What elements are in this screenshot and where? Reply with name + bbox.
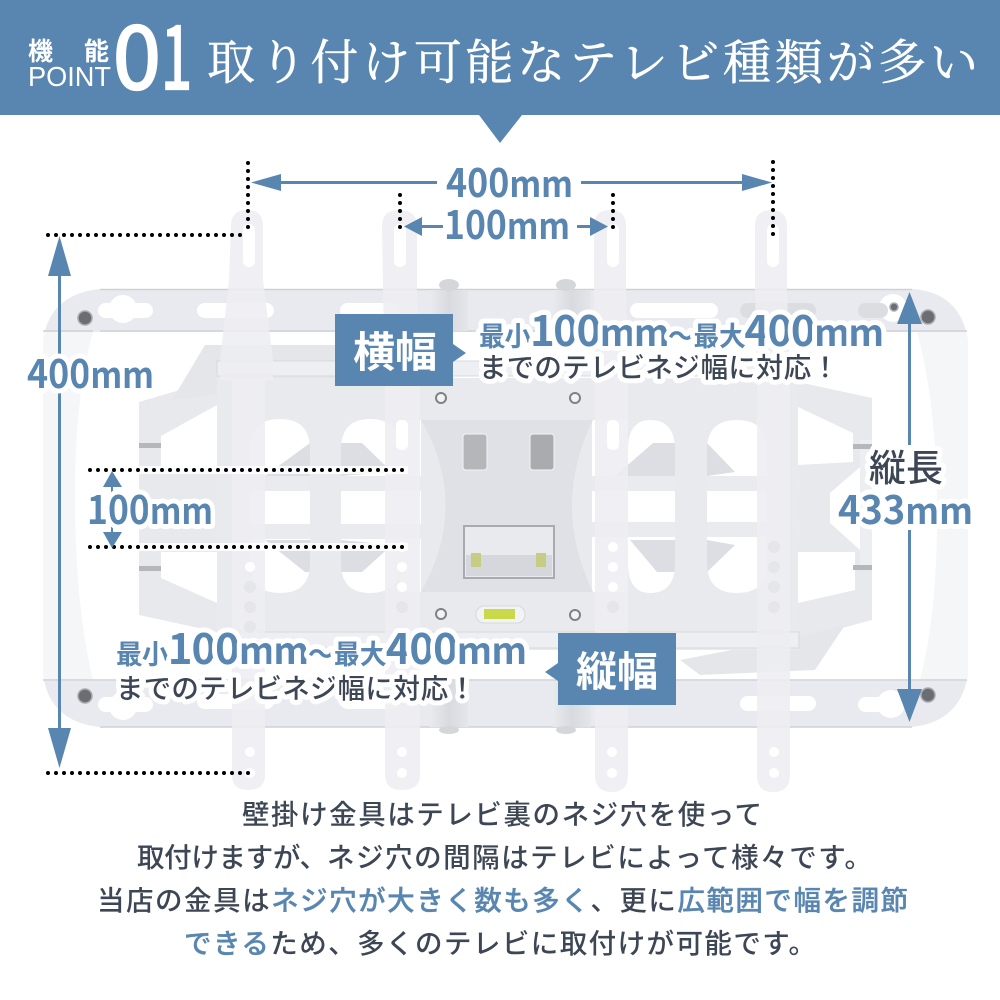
dotted guide lines — [48, 162, 773, 773]
dimension: 400mm vertical — [27, 236, 154, 768]
screws — [78, 303, 935, 703]
body text: 当店の金具はネジ穴が大きく数も多く、更に広範囲で幅を調節 — [97, 878, 908, 918]
cross rods — [217, 361, 800, 648]
body text: 壁掛け金具はテレビ裏のネジ穴を使って — [242, 792, 762, 832]
callout: 縦幅: 縦幅 — [576, 638, 658, 698]
text: height range: 最小100mm～最大400mm — [116, 616, 527, 677]
callout: 横幅: 横幅 — [353, 319, 437, 380]
frame edges — [43, 290, 967, 727]
dimension: 433mm vertical: 433mm — [838, 480, 973, 536]
label: 機能 POINT: 能 — [84, 32, 109, 68]
text: height range — [116, 616, 527, 706]
bubble level — [476, 606, 525, 623]
title: 取り付け可能なテレビ種類が多い — [207, 24, 978, 93]
dimension: 100mm horizontal: 100mm — [444, 195, 570, 251]
center panel — [421, 420, 593, 592]
label: 機能 POINT: 機 — [28, 32, 53, 68]
callout: 縦幅 — [545, 633, 676, 705]
label: 機能 POINT — [28, 32, 111, 92]
body text: ネジ穴の間隔はテレビによって様々です。 — [327, 835, 872, 875]
body text — [97, 792, 908, 961]
dimension: 400mm horizontal — [251, 153, 772, 209]
wall bracket illustration — [43, 210, 968, 792]
header banner — [0, 0, 1000, 143]
text: width range: までのテレビネジ幅に対応！ — [479, 345, 839, 385]
frame slots — [98, 294, 907, 720]
faint strap holes — [244, 541, 780, 633]
dimension: 400mm horizontal: 400mm — [446, 153, 573, 209]
dimension: 433mm vertical — [838, 292, 973, 722]
dimension: 100mm horizontal — [404, 195, 608, 251]
bolts — [436, 393, 580, 620]
pillars — [430, 279, 591, 734]
arms behind the plate — [139, 345, 872, 675]
label: 機能 POINT: POINT — [28, 61, 111, 92]
callout: 横幅 — [335, 314, 466, 386]
TV mounting plate — [217, 378, 798, 650]
body text: できるため、多くのテレビに取付けが可能です。 — [184, 921, 816, 961]
wall plate frame — [43, 289, 968, 727]
dimension: 400mm vertical: 400mm — [27, 344, 154, 400]
dimension: 433mm vertical: 縦長 — [869, 438, 943, 492]
text: height range: までのテレビネジ幅に対応！ — [116, 666, 476, 706]
panel slots — [463, 434, 554, 578]
strap holes — [243, 224, 779, 778]
mounting straps — [220, 210, 790, 792]
dimension: 100mm vertical: 100mm — [87, 480, 213, 536]
text: width range: 最小100mm～最大400mm — [479, 298, 884, 359]
body text: 取付けますが、 — [137, 835, 327, 875]
point number 01 — [113, 0, 192, 114]
